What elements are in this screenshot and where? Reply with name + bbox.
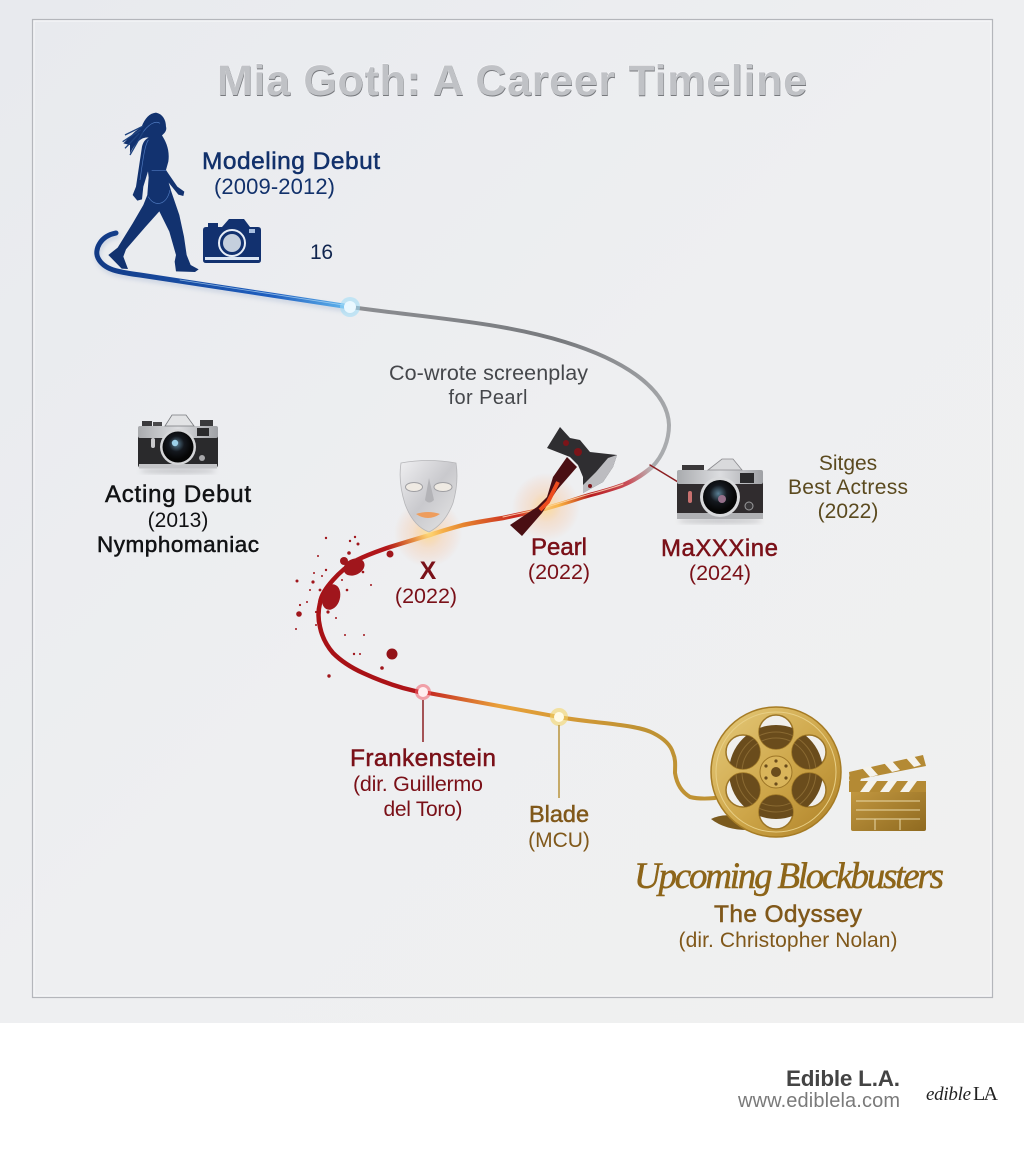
icon: vintage camera (MaXXXine)	[677, 459, 763, 524]
heading: Upcoming Blockbusters: Upcoming Blockbusters	[634, 856, 944, 897]
node: Blade	[550, 708, 568, 798]
note: co-wrote screenplay: for Pearl	[448, 387, 528, 409]
inner panel frame	[32, 20, 992, 998]
label: X: X	[420, 557, 437, 585]
label: Pearl	[528, 534, 590, 584]
icon: vintage camera (acting debut)	[138, 415, 218, 474]
label: Pearl: (2022)	[528, 560, 590, 584]
icon: blue camera	[203, 219, 261, 263]
note: co-wrote screenplay: Co-wrote screenplay	[389, 361, 588, 385]
footer logo	[926, 1083, 999, 1105]
label: Blade	[528, 801, 590, 852]
title: Mia Goth: A Career Timeline	[217, 57, 807, 105]
fire glow: Pearl	[512, 473, 580, 541]
label: MaXXXine: MaXXXine	[661, 535, 778, 562]
footer brand text	[737, 1066, 900, 1112]
label: Frankenstein: Frankenstein	[350, 745, 496, 772]
blood splatter	[295, 536, 398, 678]
icon: film reel	[711, 707, 841, 837]
label: Pearl: Pearl	[531, 534, 587, 561]
fire glow: X	[394, 499, 462, 567]
label: Frankenstein: (dir. Guillermo	[353, 772, 483, 796]
label: Acting Debut: (2013)	[148, 509, 208, 532]
label: Acting Debut: Nymphomaniac	[97, 532, 259, 557]
label: The Odyssey: The Odyssey	[714, 901, 863, 928]
footer brand text: www.ediblela.com	[737, 1090, 900, 1112]
label: Acting Debut: Acting Debut	[105, 481, 251, 508]
note: Sitges Best Actress	[788, 452, 908, 523]
label: Frankenstein	[350, 745, 496, 821]
label: Blade: Blade	[529, 801, 589, 827]
icon: clapperboard	[849, 755, 926, 831]
note: Sitges Best Actress: Sitges	[819, 452, 877, 475]
footer logo: edible	[926, 1084, 971, 1105]
number 16: 16	[310, 241, 333, 264]
label: MaXXXine	[661, 535, 778, 585]
label: MaXXXine: (2024)	[689, 561, 751, 585]
icon: theatre mask	[400, 460, 457, 532]
label: X	[395, 557, 457, 608]
footer logo: LA	[973, 1083, 999, 1105]
note: Sitges Best Actress: Best Actress	[788, 476, 908, 499]
node: modeling end	[340, 297, 360, 317]
timeline path	[97, 233, 715, 799]
note: Sitges Best Actress: (2022)	[818, 500, 878, 523]
label: Modeling Debut	[202, 148, 380, 199]
footer	[0, 1023, 1024, 1154]
label: The Odyssey: (dir. Christopher Nolan)	[678, 929, 898, 952]
note: co-wrote screenplay	[389, 361, 588, 409]
label: Modeling Debut: (2009-2012)	[214, 174, 335, 199]
label: Blade: (MCU)	[528, 829, 590, 852]
title: Mia Goth: A Career Timeline	[216, 56, 806, 104]
label: Acting Debut	[97, 481, 259, 557]
label: X: (2022)	[395, 584, 457, 608]
title: Mia Goth: A Career Timeline	[218, 58, 808, 106]
icon: bloody axe	[510, 427, 617, 536]
footer brand text: Edible L.A.	[786, 1066, 900, 1091]
icon: walking woman silhouette	[108, 113, 199, 272]
label: Frankenstein: del Toro)	[384, 798, 462, 821]
node: Frankenstein	[415, 684, 431, 742]
label: Modeling Debut: Modeling Debut	[202, 148, 380, 175]
label: The Odyssey	[678, 901, 898, 952]
